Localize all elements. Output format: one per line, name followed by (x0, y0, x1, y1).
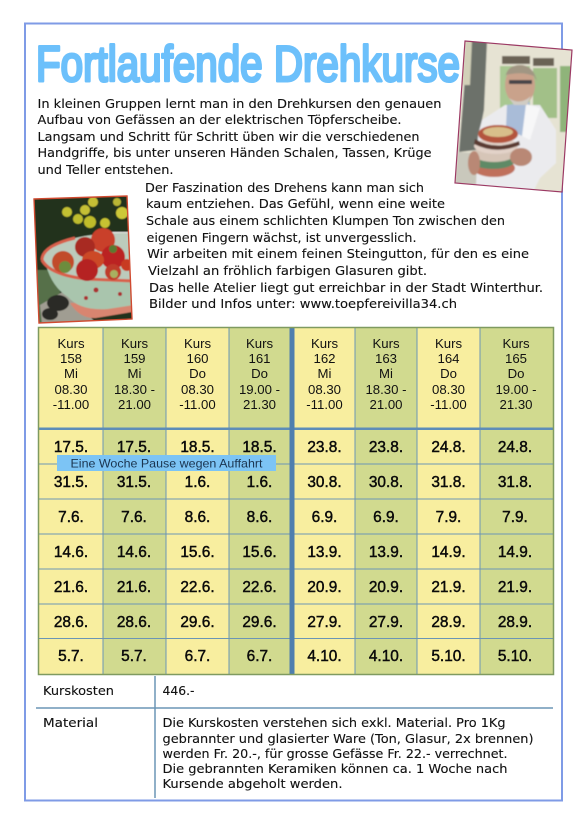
course header cells: -11.00 (430, 397, 467, 412)
course header cells: Kurs (311, 336, 338, 351)
intro text block: Handgriffe, bis unter unseren Händen Schalen, Tassen, Krüge (38, 146, 432, 161)
photo: potter holding stacked bowls (454, 40, 573, 193)
course date cells: 7.6. (121, 509, 147, 526)
course header cells: 161 (248, 351, 271, 366)
row: course cost: Kurskosten (43, 684, 114, 699)
course date cells: 29.6. (180, 614, 215, 631)
course date cells: 21.6. (117, 579, 151, 596)
course date cells: 22.6. (180, 579, 215, 596)
course date cells: 27.9. (307, 614, 342, 631)
course date cells: 14.6. (117, 544, 151, 561)
row: material (43, 716, 534, 792)
course date cells: 5.10. (498, 648, 532, 665)
course header cells: Do (508, 366, 524, 381)
course header cells: 21.00 (369, 397, 403, 412)
course date cells: 30.8. (307, 474, 342, 491)
course header cells: 08.30 (308, 382, 341, 397)
description text block: kaum entziehen. Das Gefühl, wenn eine weite (146, 197, 445, 212)
course header cells: Do (251, 366, 268, 381)
course schedule table (38, 328, 554, 674)
description text block: Schale aus einem schlichten Klumpen Ton zwischen den (146, 214, 505, 229)
course date cells: 5.7. (121, 648, 147, 665)
course date cells: 5.10. (431, 648, 466, 665)
description text block: Wir arbeiten mit einem feinen Steingutton, für den es eine (147, 247, 529, 262)
course header cells: Do (440, 366, 457, 381)
course header cells: 19.00 - (239, 382, 280, 397)
course date cells: 27.9. (369, 614, 403, 631)
course date cells: 23.8. (369, 439, 403, 456)
course date cells: 14.6. (54, 544, 88, 561)
course header cells: Kurs (121, 336, 148, 351)
course header cells: 159 (123, 351, 146, 366)
course date cells: 4.10. (307, 648, 342, 665)
course header cells: 19.00 - (495, 382, 537, 397)
course header cells: 158 (60, 351, 82, 366)
course header cells: 160 (186, 351, 209, 366)
course date cells: 13.9. (307, 544, 342, 561)
course date cells: 21.9. (498, 579, 532, 596)
row: material: gebrannter und glasierter Ware (Ton, Glasur, 2x brennen) (162, 732, 534, 747)
row: course cost: 446.- (162, 684, 194, 699)
course header cells: 08.30 (432, 382, 465, 397)
course date cells: 15.6. (242, 544, 277, 561)
course date cells: 31.5. (54, 474, 88, 491)
course header cells: 21.30 (243, 397, 276, 412)
course date cells: 7.9. (436, 509, 461, 526)
course date cells: 8.6. (247, 509, 272, 526)
course date cells: 5.7. (58, 648, 84, 665)
course date cells: 1.6. (247, 474, 272, 491)
course date cells: 29.6. (242, 614, 277, 631)
course date cells: 20.9. (307, 579, 342, 596)
course header cells: Kurs (372, 336, 400, 351)
course date cells: 18.5. (180, 439, 215, 456)
course date cells: 6.9. (312, 509, 337, 526)
course header cells: 21.00 (118, 397, 151, 412)
description text block: eigenen Fingern wächst, ist unvergesslich. (146, 231, 416, 246)
course header cells: Mi (318, 366, 332, 381)
course date cells: 28.6. (117, 614, 151, 631)
course date cells: 24.8. (498, 439, 532, 456)
intro text block: Aufbau von Gefässen an der elektrischen Töpferscheibe. (38, 113, 402, 128)
course date cells: 14.9. (431, 544, 466, 561)
course date cells: 15.6. (180, 544, 215, 561)
course header cells: Kurs (435, 336, 462, 351)
course header cells: 08.30 (181, 382, 214, 397)
course date cells: 28.9. (431, 614, 466, 631)
course header cells: 165 (505, 351, 527, 366)
course date cells: 28.9. (498, 614, 532, 631)
course header cells: -11.00 (306, 397, 343, 412)
course date cells: 20.9. (369, 579, 403, 596)
course header cells: 08.30 (54, 382, 88, 397)
course date cells: 31.5. (117, 474, 151, 491)
course header cells: 163 (375, 351, 397, 366)
row: course cost (43, 684, 194, 699)
intro text block: In kleinen Gruppen lernt man in den Drehkursen den genauen (38, 97, 442, 112)
course date cells: 7.6. (58, 509, 84, 526)
course date cells: 6.7. (185, 648, 210, 665)
photo: strawberries in a bowl (30, 195, 135, 325)
description text block: Der Faszination des Drehens kann man sich (145, 181, 424, 196)
callout: one week break: Eine Woche Pause wegen Auffahrt (70, 456, 263, 470)
course date cells: 31.8. (431, 474, 466, 491)
course header cells: Kurs (502, 336, 530, 351)
course date cells: 24.8. (431, 439, 466, 456)
course date cells: 18.5. (242, 439, 277, 456)
course date cells: 6.7. (247, 648, 272, 665)
row: material: Die Kurskosten verstehen sich exkl. Material. Pro 1Kg (162, 716, 506, 731)
cost and material table (36, 676, 553, 798)
intro text block: Langsam und Schritt für Schritt üben wir die verschiedenen (38, 130, 420, 145)
course date cells: 17.5. (54, 439, 88, 456)
course header cells: Kurs (57, 336, 85, 351)
course header cells: 18.30 - (365, 382, 407, 397)
row: material: Material (43, 716, 98, 731)
course date cells: 4.10. (369, 648, 403, 665)
course header cells: -11.00 (53, 397, 89, 412)
course header cells: Kurs (246, 336, 273, 351)
course header cells: Mi (64, 366, 78, 381)
course header cells: Mi (379, 366, 393, 381)
course header cells: 162 (313, 351, 336, 366)
course date cells: 22.6. (242, 579, 277, 596)
description text block (145, 181, 543, 312)
course header cells: Mi (128, 366, 142, 381)
course date cells: 31.8. (498, 474, 532, 491)
row: material: Die gebrannten Keramiken können ca. 1 Woche nach (162, 762, 508, 777)
course date cells: 23.8. (307, 439, 342, 456)
course date cells: 13.9. (369, 544, 403, 561)
course date cells: 1.6. (185, 474, 210, 491)
course header cells: Kurs (184, 336, 211, 351)
course header cells: 164 (437, 351, 460, 366)
course date cells: 7.9. (502, 509, 528, 526)
course date cells: 14.9. (498, 544, 532, 561)
intro text block: und Teller entstehen. (38, 163, 173, 178)
course date cells: 21.6. (54, 579, 88, 596)
column backgrounds (39, 328, 553, 674)
course date cells: 21.9. (431, 579, 466, 596)
course header cells: Do (189, 366, 206, 381)
intro text block (38, 97, 442, 178)
title: Fortlaufende Drehkurse (36, 36, 460, 92)
row: material: werden Fr. 20.-, für grosse Gefässe Fr. 22.- verrechnet. (162, 747, 508, 762)
course header cells: 21.30 (499, 397, 533, 412)
course date cells: 17.5. (117, 439, 151, 456)
course date cells (54, 439, 532, 665)
course date cells: 30.8. (369, 474, 403, 491)
course date cells: 6.9. (373, 509, 399, 526)
description text block: Bilder und Infos unter: www.toepfereivilla34.ch (149, 297, 457, 312)
course date cells: 8.6. (185, 509, 210, 526)
description text block: Vielzahl an fröhlich farbigen Glasuren gibt. (148, 264, 427, 279)
course date cells: 28.6. (54, 614, 88, 631)
row: material: Kursende abgeholt werden. (162, 777, 342, 792)
course header cells: -11.00 (179, 397, 216, 412)
course header cells (53, 336, 537, 412)
course header cells: 18.30 - (114, 382, 155, 397)
description text block: Das helle Atelier liegt gut erreichbar in der Stadt Winterthur. (149, 281, 543, 296)
